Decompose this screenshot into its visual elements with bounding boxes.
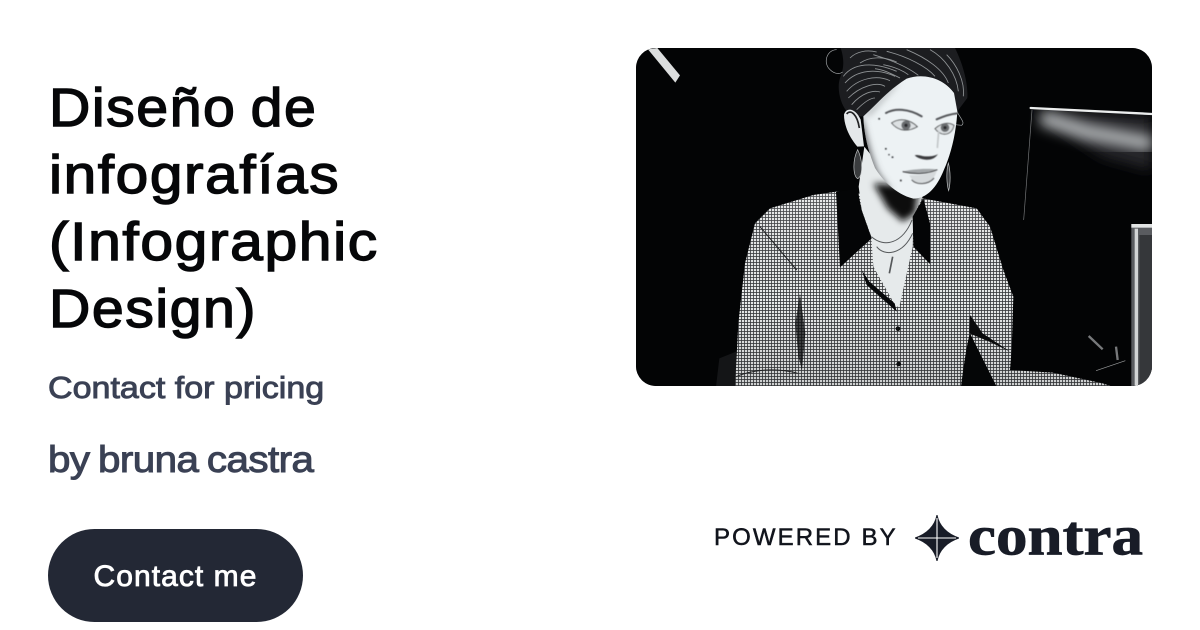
head xyxy=(826,48,967,199)
neck and chest xyxy=(859,147,923,307)
sleeve folds and torso shadows xyxy=(795,293,805,370)
eyebrows xyxy=(886,110,957,119)
monitor xyxy=(1024,108,1152,387)
title xyxy=(49,78,379,339)
facial features xyxy=(878,110,957,184)
contact button: Contact me xyxy=(94,560,257,593)
collar xyxy=(836,188,930,267)
necklaces xyxy=(871,220,913,273)
title: (Infographic xyxy=(49,212,379,272)
shadow under jaw xyxy=(873,183,919,222)
price text: Contact for pricing xyxy=(48,370,324,405)
ear xyxy=(844,110,864,147)
title: Design) xyxy=(49,279,257,339)
loose curl xyxy=(826,50,963,125)
chair xyxy=(716,352,736,387)
title: Diseño de xyxy=(49,78,317,138)
contact button xyxy=(48,529,303,622)
earrings xyxy=(854,150,950,191)
powered by label: POWERED BY xyxy=(714,524,898,551)
title: infografías xyxy=(49,145,340,205)
nose xyxy=(915,154,938,160)
face shading xyxy=(864,84,899,188)
photo: woman at computer xyxy=(636,48,1152,386)
lips xyxy=(903,169,937,173)
contra wordmark: contra xyxy=(968,506,1143,568)
buttons xyxy=(896,326,901,366)
hair xyxy=(839,48,967,116)
eyes xyxy=(892,120,954,134)
lamp stick xyxy=(648,48,680,83)
author byline: by bruna castra xyxy=(48,439,313,480)
icon: contra star xyxy=(915,515,959,561)
face skin xyxy=(863,76,957,199)
shirt xyxy=(735,192,1113,387)
moles xyxy=(878,118,902,181)
